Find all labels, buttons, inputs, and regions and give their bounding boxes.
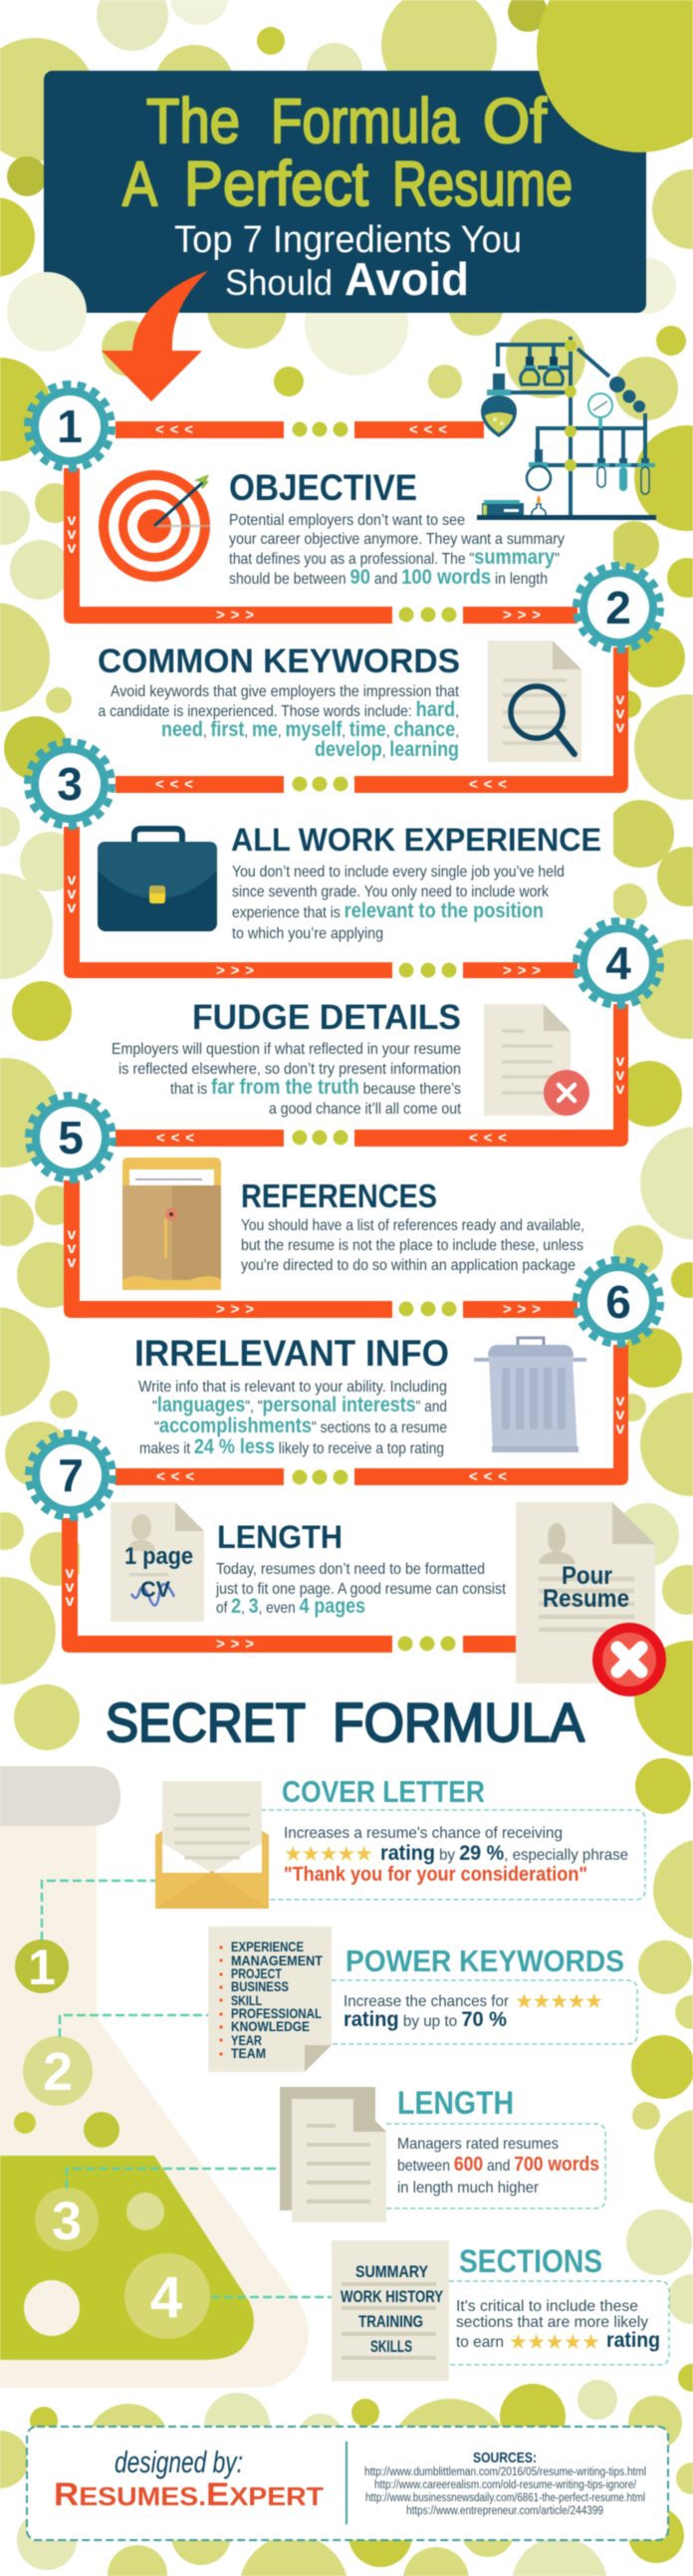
text block: It's critical to include these [456, 2298, 638, 2315]
keyword document [208, 1927, 332, 2072]
route chevrons: >>> [216, 962, 254, 979]
text block [112, 1041, 461, 1118]
bubble 1: 1 [28, 1939, 56, 1995]
text block [232, 864, 565, 942]
route chevrons: >>> [216, 1636, 254, 1653]
gear 3: 3 [57, 758, 83, 810]
heading: SECTIONS [459, 2243, 602, 2279]
route chevrons [66, 421, 625, 1653]
title banner [7, 0, 693, 352]
gear 4 [576, 920, 661, 1006]
keyword document: TEAM [231, 2046, 266, 2061]
sections document: SUMMARY [355, 2262, 429, 2281]
bubble 4 [124, 2253, 210, 2339]
panel: objective [99, 466, 565, 589]
text block: need, first, me, myself, time, chance, [161, 718, 459, 741]
text block: develop, learning [315, 738, 459, 761]
heading: secret formula [106, 1691, 584, 1753]
route chevrons: v [68, 1226, 77, 1243]
text block: rating [606, 2329, 660, 2352]
text block [284, 1825, 628, 1886]
text block: that defines you as a professional. The "summary" [229, 546, 560, 569]
text block: rating by 29 %, especially phrase [380, 1842, 628, 1865]
text block: is reflected elsewhere, so don’t try present information [118, 1061, 461, 1078]
route chevrons: >>> [216, 607, 254, 624]
text block: Potential employers don’t want to see [229, 512, 465, 529]
keyword document: BUSINESS [231, 1979, 289, 1994]
gear 7: 7 [58, 1449, 84, 1501]
route chevrons: <<< [156, 1130, 194, 1147]
bubble 3 [35, 2188, 99, 2251]
sources: http://www.careerealism.com/old-resume-writing-tips-ignore/ [374, 2479, 637, 2491]
panel: fudge details [112, 998, 589, 1118]
subtitle: Top 7 Ingredients You [174, 219, 522, 261]
sources: SOURCES: [473, 2449, 537, 2466]
route chevrons: <<< [155, 776, 193, 793]
heading: COMMON KEYWORDS [98, 643, 460, 680]
route chevrons: >>> [216, 1301, 254, 1318]
text block [138, 1379, 447, 1458]
keyword document: PROJECT [231, 1966, 283, 1981]
title text: Perfect [184, 149, 368, 219]
title text: A [122, 149, 157, 219]
heading: ALL WORK EXPERIENCE [231, 822, 601, 858]
route chevrons: v [66, 1593, 75, 1610]
icon: rejected document [484, 1004, 589, 1116]
sources [364, 2449, 646, 2517]
text block: since seventh grade. You only need to include work [232, 884, 550, 901]
icon: one page CV [111, 1502, 204, 1622]
text block: "languages", "personal interests" and [152, 1394, 447, 1417]
text block [344, 1990, 603, 2031]
dashed callout [261, 1810, 645, 1900]
text block: makes it 24 % less likely to receive a top rating [139, 1435, 444, 1458]
gear 1: 1 [57, 400, 83, 452]
text block: but the resume is not the place to include these, unless [241, 1237, 583, 1254]
sections document: SKILLS [370, 2337, 412, 2356]
route chevrons: v [68, 512, 77, 529]
text block: Employers will question if what reflected in your resume [112, 1041, 461, 1058]
text block: your career objective anymore. They want a summary [229, 531, 565, 548]
route chevrons: >>> [503, 1301, 541, 1318]
route chevrons: <<< [155, 421, 193, 438]
heading: secret formula: SECRET [106, 1691, 306, 1753]
sections document: TRAINING [358, 2312, 423, 2331]
title text: Of [483, 87, 547, 156]
icon: poor resume document: Pour [562, 1562, 612, 1590]
route chevrons: <<< [469, 1468, 507, 1485]
star rating: ★★★★★ [284, 1843, 373, 1866]
text block: "accomplishments" sections to a resume [154, 1415, 447, 1437]
text block: rating by up to 70 % [344, 2008, 507, 2031]
text block: just to fit one page. A good resume can consist [215, 1581, 506, 1598]
keyword document: EXPERIENCE [231, 1939, 304, 1954]
text block: sections that are more likely [456, 2314, 648, 2331]
designed by: designed by: [115, 2445, 243, 2479]
route chevrons: v [66, 1565, 75, 1582]
bubble 1 [15, 1939, 69, 1995]
text block: you're directed to do so within an application package [241, 1257, 576, 1274]
star rating: ★★★★★ [515, 1990, 603, 2013]
panel: common keywords [98, 641, 581, 762]
route dots [293, 422, 456, 1652]
gear 6 [576, 1259, 661, 1345]
title text [122, 87, 573, 219]
dashed connectors [42, 1881, 332, 2297]
heading: LENGTH [397, 2085, 514, 2121]
sources: https://www.entrepreneur.com/article/244399 [406, 2505, 603, 2517]
panel: cover letter [155, 1774, 645, 1909]
route chevrons: v [616, 1393, 625, 1410]
text block [241, 1217, 584, 1274]
route chevrons: v [616, 1067, 625, 1084]
gear 2: 2 [605, 582, 631, 634]
text block: Increases a resume's chance of receiving [284, 1825, 563, 1842]
subtitle [174, 219, 522, 305]
text block: between 600 and 700 words [397, 2154, 599, 2176]
bubble 3: 3 [52, 2191, 82, 2251]
orange route path [62, 421, 628, 1653]
text block: "Thank you for your consideration" [284, 1864, 587, 1886]
text block: to earn [456, 2334, 504, 2351]
panel: power keywords [208, 1927, 637, 2072]
title text: Resume [392, 149, 573, 219]
text block: You should have a list of references ready and available, [241, 1217, 584, 1234]
gear 6: 6 [605, 1276, 631, 1328]
route chevrons: <<< [469, 776, 507, 793]
title text: Formula [271, 87, 460, 156]
route chevrons: >>> [503, 962, 541, 979]
panel: sections [332, 2240, 669, 2381]
route chevrons: v [66, 1579, 75, 1596]
text block: that is far from the truth because there’s [170, 1076, 461, 1099]
heading: OBJECTIVE [229, 466, 417, 508]
route chevrons: <<< [156, 1468, 194, 1485]
icon: one page CV: 1 page [124, 1543, 193, 1570]
subtitle: Avoid [345, 253, 469, 305]
route chevrons: v [68, 900, 77, 916]
flask illustration [0, 1766, 309, 2388]
route chevrons: >>> [503, 607, 541, 624]
heading: secret formula: FORMULA [333, 1691, 584, 1753]
route chevrons: v [68, 540, 77, 557]
icon: document with magnifier [488, 641, 581, 762]
keyword document: MANAGEMENT [231, 1953, 324, 1968]
gear 1 [28, 385, 112, 468]
gear 3 [28, 741, 112, 827]
heading: FUDGE DETAILS [192, 998, 461, 1037]
dashed callout [332, 1980, 637, 2044]
route chevrons: <<< [409, 421, 447, 438]
panel: length [111, 1502, 666, 1696]
route chevrons: v [68, 1254, 77, 1271]
route chevrons: v [616, 1420, 625, 1437]
gear 2 [576, 566, 661, 649]
route chevrons: v [68, 872, 77, 889]
logo: RESUMES. EXPERT [54, 2476, 324, 2512]
bubble 2: 2 [43, 2042, 73, 2102]
sources: http://www.dumblittleman.com/2016/05/resume-writing-tips.html [364, 2466, 646, 2478]
text block: to which you’re applying [232, 925, 383, 942]
icon: poor resume document [516, 1502, 666, 1696]
heading: IRRELEVANT INFO [134, 1333, 449, 1374]
text block [98, 683, 459, 761]
keyword document: SKILL [231, 1993, 262, 2008]
subtitle: Should [225, 262, 333, 303]
text block: Avoid keywords that give employers the impression that [111, 683, 459, 700]
keyword document: KNOWLEDGE [231, 2019, 310, 2034]
bubble 2 [23, 2036, 93, 2106]
panel: irrelevant info [134, 1333, 586, 1458]
text block [229, 512, 565, 589]
text block: a candidate is inexperienced. Those words include: hard, [98, 698, 459, 721]
route chevrons: v [616, 719, 625, 736]
icon: trash can [474, 1338, 586, 1452]
icon: envelope [155, 1781, 269, 1909]
route chevrons: v [68, 526, 77, 543]
title text: The [146, 87, 240, 156]
icon: target [99, 470, 210, 582]
text block: experience that is relevant to the position [232, 900, 544, 922]
text block: Today, resumes don’t need to be formatted [216, 1561, 485, 1578]
keyword document: PROFESSIONAL [231, 2006, 322, 2021]
heading: REFERENCES [241, 1177, 437, 1214]
route chevrons: v [616, 705, 625, 722]
route chevrons: <<< [469, 1130, 507, 1147]
arrow from title to step 1 [102, 271, 208, 401]
text block: Write info that is relevant to your ability. Including [138, 1379, 447, 1396]
icon: poor resume document: Resume [543, 1585, 629, 1613]
sections document: WORK HISTORY [341, 2287, 444, 2306]
icon: briefcase [98, 829, 217, 931]
route chevrons: v [68, 1240, 77, 1257]
sources: http://www.businessnewsdaily.com/6861-the-perfect-resume.html [365, 2492, 645, 2504]
route chevrons: v [68, 886, 77, 902]
icon: one page CV: CV [140, 1577, 170, 1602]
text block: You don’t need to include every single job you’ve held [232, 864, 565, 881]
panel: references [122, 1158, 584, 1290]
keyword document: YEAR [231, 2033, 262, 2048]
panel: length formula [280, 2085, 605, 2222]
bubble 4: 4 [150, 2265, 182, 2330]
text block [456, 2298, 660, 2354]
dashed callout [386, 2124, 605, 2208]
heading: COVER LETTER [282, 1774, 485, 1809]
text block: Managers rated resumes [397, 2136, 559, 2153]
route chevrons: v [616, 1407, 625, 1423]
gear 7 [28, 1432, 114, 1518]
text block: of 2, 3, even 4 pages [216, 1595, 365, 1618]
heading: LENGTH [217, 1519, 343, 1555]
icon: lab equipment [477, 337, 656, 520]
gear 4: 4 [605, 937, 631, 989]
dashed callout [449, 2281, 669, 2365]
text block: a good chance it’ll all come out [269, 1101, 461, 1118]
gear 5 [28, 1096, 114, 1179]
route chevrons: v [616, 1053, 625, 1070]
route chevrons: v [616, 691, 625, 708]
footer panel [27, 2427, 668, 2540]
text block: Increase the chances for [344, 1993, 510, 2010]
text block [397, 2136, 599, 2196]
gear 5: 5 [58, 1112, 84, 1163]
panel: all work experience [98, 822, 601, 942]
text block: in length much higher [397, 2180, 540, 2196]
sections document [332, 2240, 449, 2381]
icon: stacked pages [280, 2087, 386, 2222]
star rating: ★★★★★ [509, 2331, 600, 2354]
route chevrons: v [616, 1081, 625, 1098]
text block: should be between 90 and 100 words in length [229, 566, 548, 589]
text block [215, 1561, 506, 1618]
heading: POWER KEYWORDS [346, 1943, 624, 1978]
icon: envelope folder [122, 1158, 221, 1290]
